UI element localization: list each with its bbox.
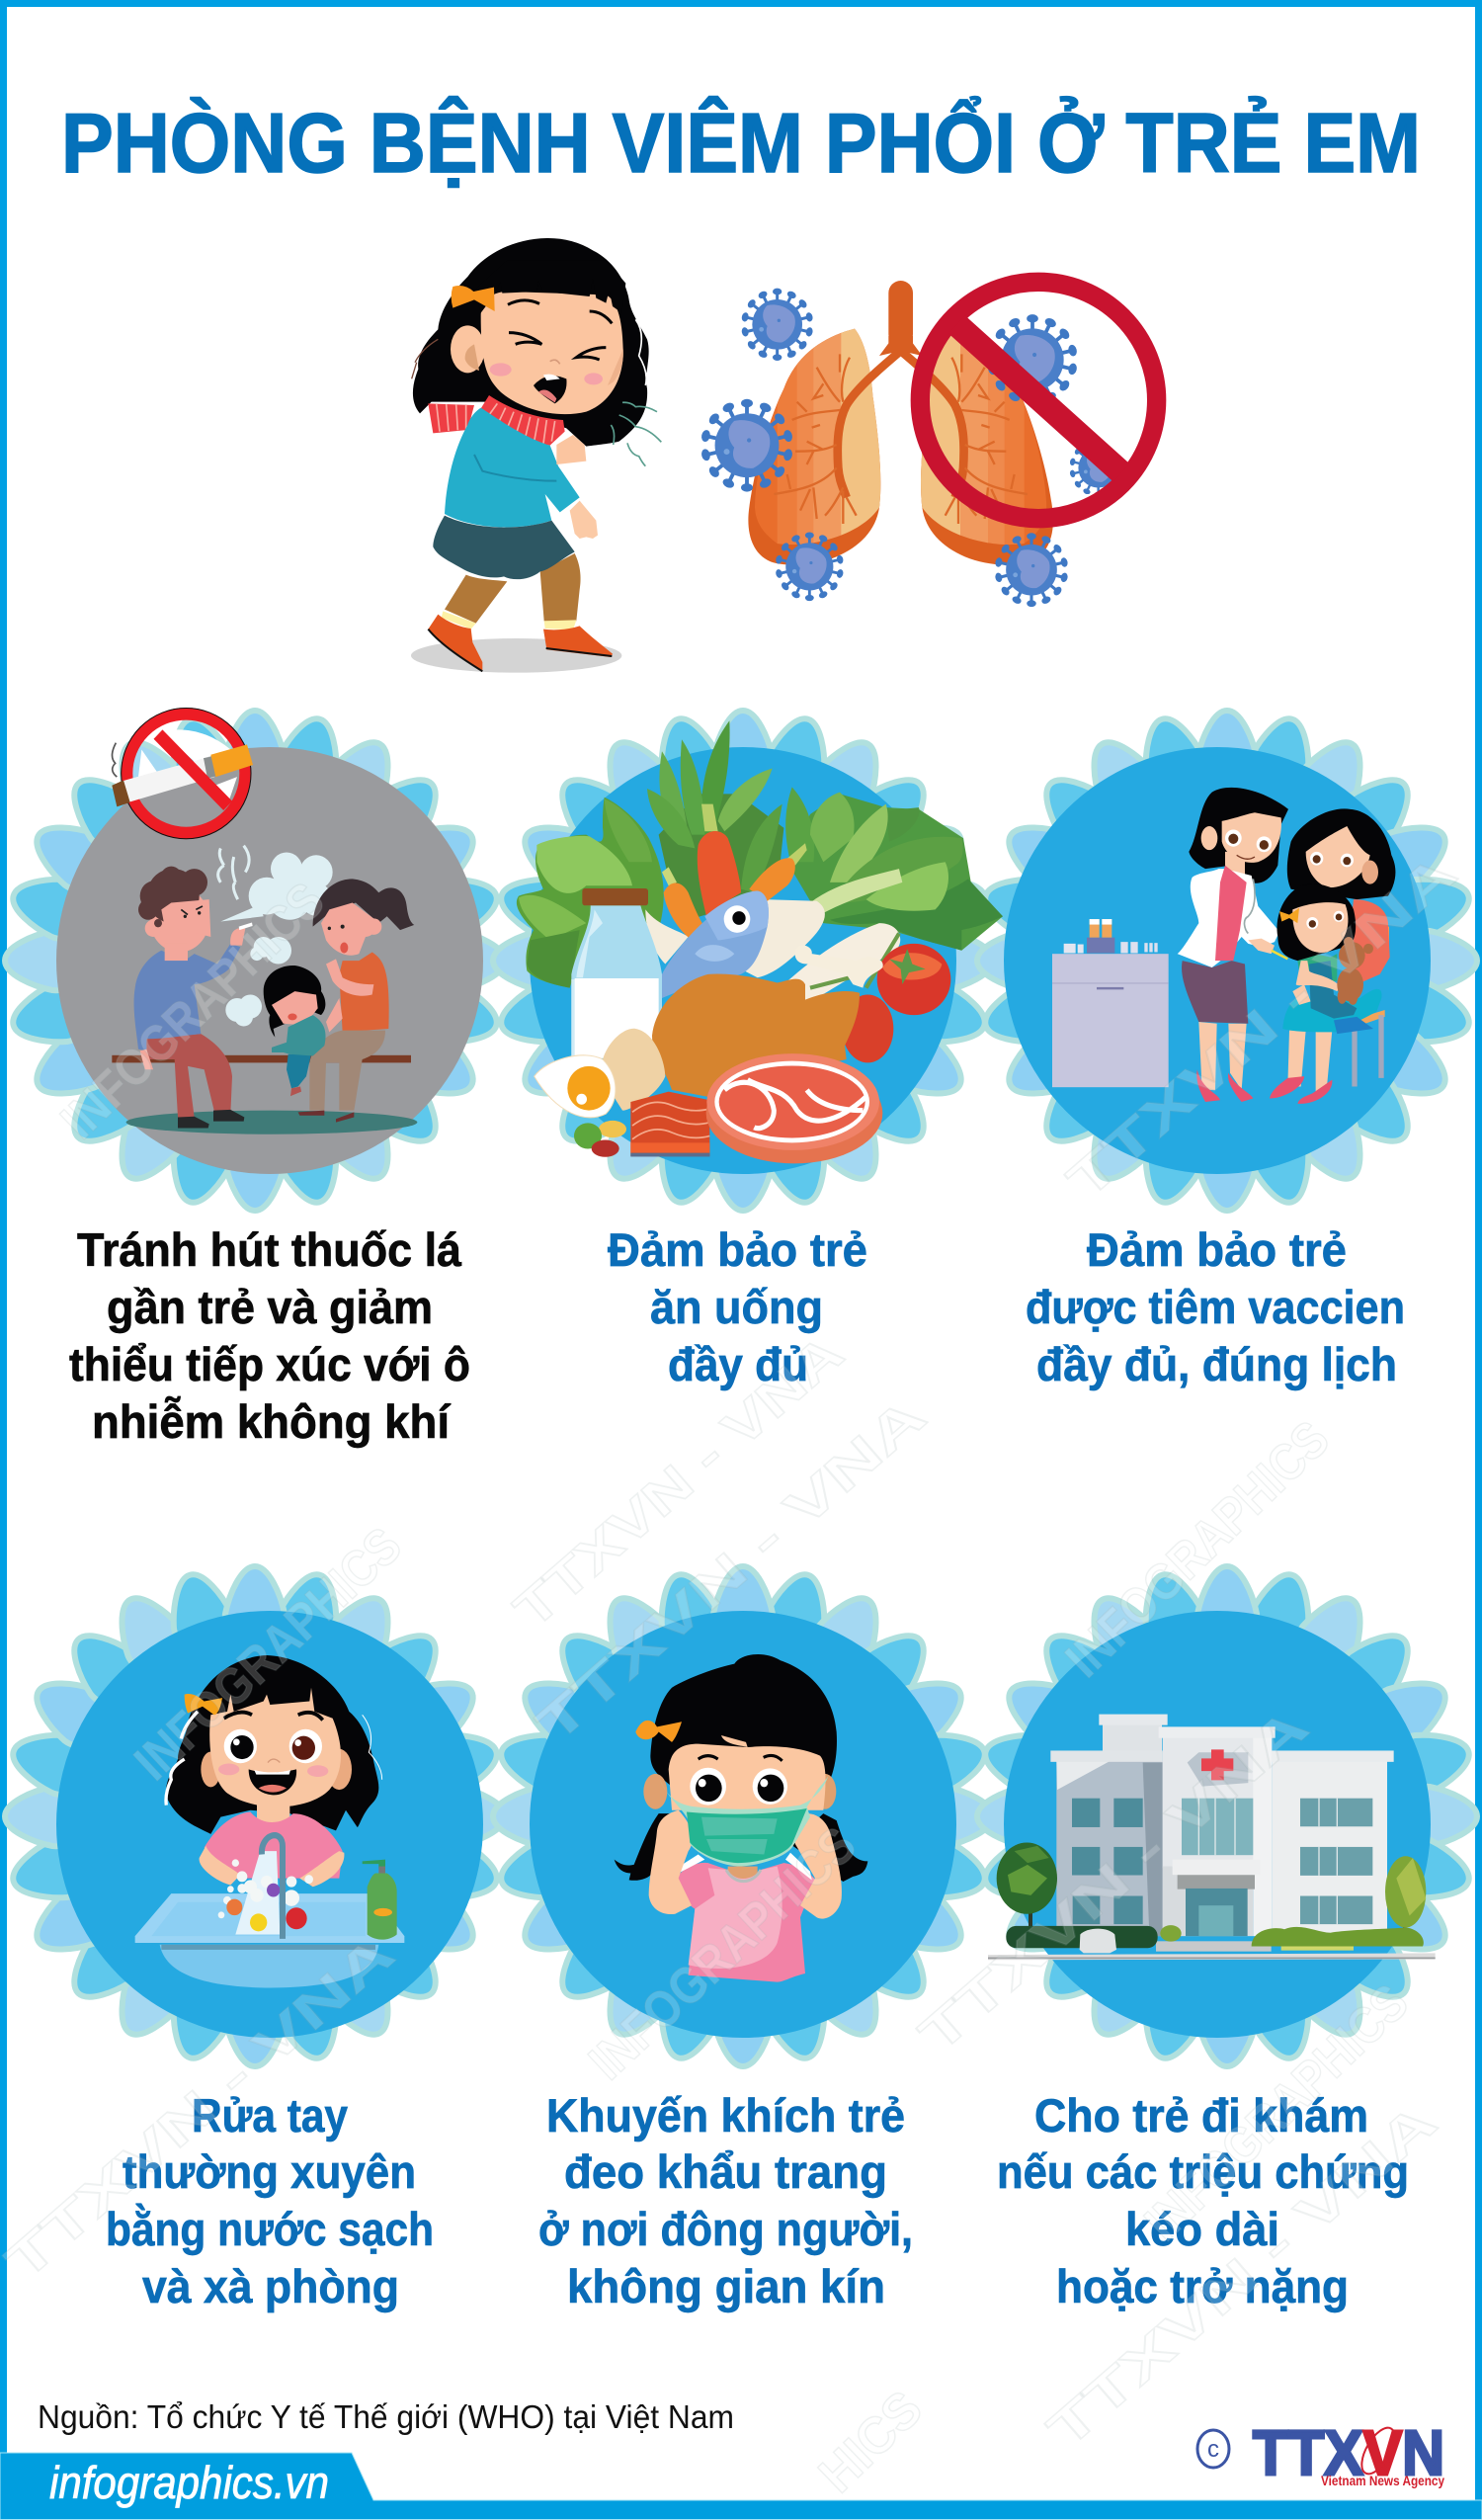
watermarks: INFOGRAPHICS <box>1134 1974 1420 2252</box>
circle: vaccine panel <box>1004 747 1431 1174</box>
circle: hospital panel <box>1004 1611 1431 2038</box>
caption: vaccination <box>1026 1223 1405 1390</box>
flower backdrop: column 2 row 1 <box>493 711 993 1211</box>
flower backdrop: column 1 row 1 <box>5 711 505 1211</box>
circle: handwashing panel <box>56 1611 483 2038</box>
watermarks: TTXVN - VNA <box>1057 843 1467 1211</box>
caption: avoid smoke and air pollution: nhiễm không khí <box>92 1395 452 1448</box>
logo: TTXVN Vietnam News Agency: Vietnam News Agency <box>1321 2473 1444 2488</box>
caption: vaccination: đầy đủ, đúng lịch <box>1036 1338 1397 1390</box>
caption: hand washing: Rửa tay <box>192 2089 348 2142</box>
caption: adequate nutrition <box>608 1223 867 1390</box>
caption: seeing a doctor: hoặc trở nặng <box>1056 2260 1349 2312</box>
watermarks: INFOGRAPHICS <box>579 1816 867 2091</box>
source note: Nguồn: Tổ chức Y tế Thế giới (WHO) tại Việt Nam <box>38 2398 734 2435</box>
illustration: girl washing hands <box>135 1655 404 1988</box>
watermarks: TTXVN - VNA <box>527 1386 937 1754</box>
website label: infographics.vn <box>49 2457 329 2508</box>
caption: wearing masks: đeo khẩu trang <box>564 2145 887 2198</box>
illustration: girl putting on a face mask <box>615 1654 867 1982</box>
caption: hand washing: và xà phòng <box>142 2260 399 2312</box>
illustration: lungs with viruses and prohibition sign <box>700 281 1157 607</box>
flower backdrop: column 2 row 2 <box>493 1566 993 2066</box>
caption: avoid smoke and air pollution: Tránh hút thuốc lá <box>77 1223 462 1276</box>
title: PHÒNG BỆNH VIÊM PHỔI Ở TRẺ EM <box>61 96 1421 191</box>
caption: avoid smoke and air pollution: gần trẻ và giảm <box>107 1281 433 1333</box>
watermarks: TTXVN - VNA <box>1037 2092 1447 2460</box>
illustration: doctor vaccinating a child <box>1052 788 1395 1104</box>
caption: avoid smoke and air pollution <box>69 1223 470 1448</box>
illustration: family exposed to cigarette smoke <box>112 709 417 1134</box>
flower backdrop: column 3 row 2 <box>977 1566 1477 2066</box>
watermarks: HICS <box>808 2381 934 2504</box>
caption: hand washing: thường xuyên <box>123 2145 416 2198</box>
flower backdrop: column 3 row 1 <box>977 711 1477 1211</box>
watermarks: INFOGRAPHICS <box>1055 1410 1341 1689</box>
circle: food panel <box>530 747 956 1174</box>
watermarks <box>0 843 1467 2504</box>
caption: adequate nutrition: đầy đủ <box>668 1338 808 1390</box>
caption: adequate nutrition: ăn uống <box>650 1281 823 1333</box>
caption: wearing masks <box>538 2089 913 2312</box>
caption: vaccination: Đảm bảo trẻ <box>1087 1223 1347 1276</box>
caption: hand washing: bằng nước sạch <box>106 2203 434 2255</box>
caption: wearing masks: Khuyến khích trẻ <box>546 2089 905 2142</box>
watermarks: TTXVN - VNA <box>504 1324 855 1639</box>
watermarks: INFOGRAPHICS <box>124 1517 413 1792</box>
caption: avoid smoke and air pollution: thiểu tiếp xúc với ô <box>69 1338 470 1390</box>
caption: seeing a doctor <box>997 2089 1409 2312</box>
circle: mask panel <box>530 1611 956 2038</box>
illustration: healthy food <box>517 720 1003 1163</box>
illustration: hospital building <box>988 1715 1436 1960</box>
caption: seeing a doctor: Cho trẻ đi khám <box>1034 2089 1368 2142</box>
footer tab <box>0 2453 1482 2520</box>
circle: smoking panel <box>56 747 483 1174</box>
caption: vaccination: được tiêm vaccien <box>1026 1281 1405 1333</box>
caption: seeing a doctor: nếu các triệu chứng <box>997 2145 1409 2198</box>
illustration: coughing girl <box>411 238 661 673</box>
caption: adequate nutrition: Đảm bảo trẻ <box>608 1223 867 1276</box>
caption: seeing a doctor: kéo dài <box>1125 2203 1279 2255</box>
logo: TTXVN Vietnam News Agency: TTXVN <box>1253 2417 1444 2488</box>
caption: hand washing <box>106 2089 434 2312</box>
caption: wearing masks: ở nơi đông người, <box>538 2203 913 2255</box>
watermarks: TTXVN - VNA <box>909 1697 1319 2064</box>
flower backdrop: column 1 row 2 <box>5 1566 505 2066</box>
watermarks: TTXVN - VNA <box>0 1924 405 2292</box>
caption: wearing masks: không gian kín <box>567 2260 885 2312</box>
watermarks: INFOGRAPHICS <box>50 872 336 1150</box>
logo: TTXVN Vietnam News Agency: c <box>1207 2436 1219 2463</box>
